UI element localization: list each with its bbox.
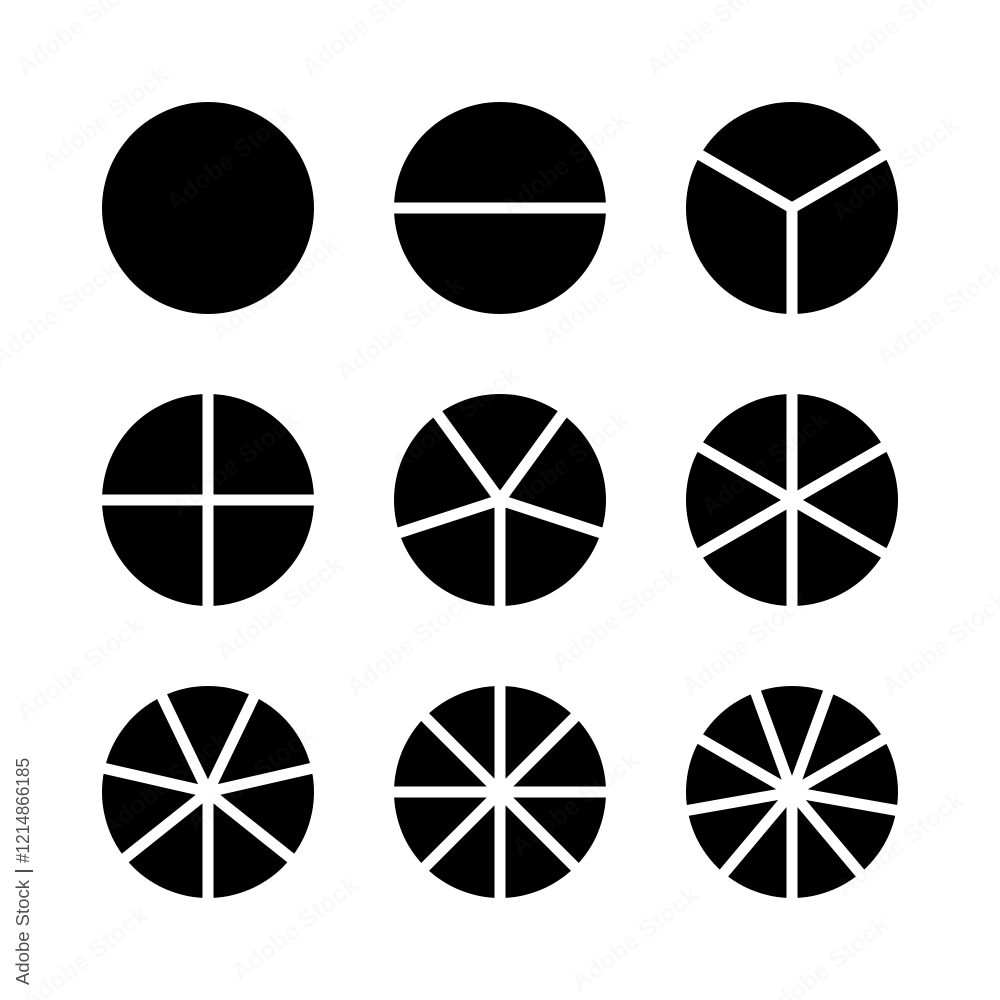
pie: nine parts <box>676 681 908 910</box>
pie: five parts <box>388 394 612 618</box>
stock credit: Adobe Stock <box>13 879 33 985</box>
watermark pattern: Adobe Stock <box>546 561 684 677</box>
watermark pattern: Adobe Stock <box>206 231 344 347</box>
pie: three parts <box>686 102 898 326</box>
watermark pattern: Adobe Stock <box>506 746 644 862</box>
stock credit: #1214866185 <box>13 758 33 863</box>
watermark pattern: Adobe Stock <box>696 406 834 522</box>
watermark pattern: Adobe Stock <box>96 726 234 842</box>
watermark pattern: Adobe Stock <box>161 101 299 217</box>
watermark pattern: Adobe Stock <box>166 406 304 522</box>
watermark pattern: Adobe Stock <box>11 611 149 727</box>
stock credit <box>13 758 33 985</box>
pie: six parts <box>686 382 898 618</box>
watermark pattern: Adobe Stock <box>386 361 524 477</box>
pie: four parts <box>90 382 326 618</box>
watermark pattern: Adobe Stock <box>536 236 674 352</box>
watermark pattern: Adobe Stock <box>36 61 174 177</box>
pie: eight parts <box>382 674 618 910</box>
watermark pattern: Adobe Stock <box>226 871 364 987</box>
pie: two parts <box>382 102 618 314</box>
watermark pattern: Adobe Stock <box>496 406 634 522</box>
watermark pattern: Adobe Stock <box>831 786 969 902</box>
pie: whole circle <box>102 102 314 314</box>
watermark pattern: Adobe Stock <box>211 551 349 667</box>
watermark pattern: Adobe Stock <box>566 881 704 997</box>
watermark pattern: Adobe Stock <box>676 586 814 702</box>
pie: seven parts <box>93 686 323 910</box>
watermark pattern: Adobe Stock <box>496 106 634 222</box>
watermark pattern: Adobe Stock <box>826 111 964 227</box>
watermark pattern: Adobe Stock <box>341 586 479 702</box>
watermark pattern: Adobe Stock <box>181 721 319 837</box>
watermark pattern: Adobe Stock <box>331 271 469 387</box>
